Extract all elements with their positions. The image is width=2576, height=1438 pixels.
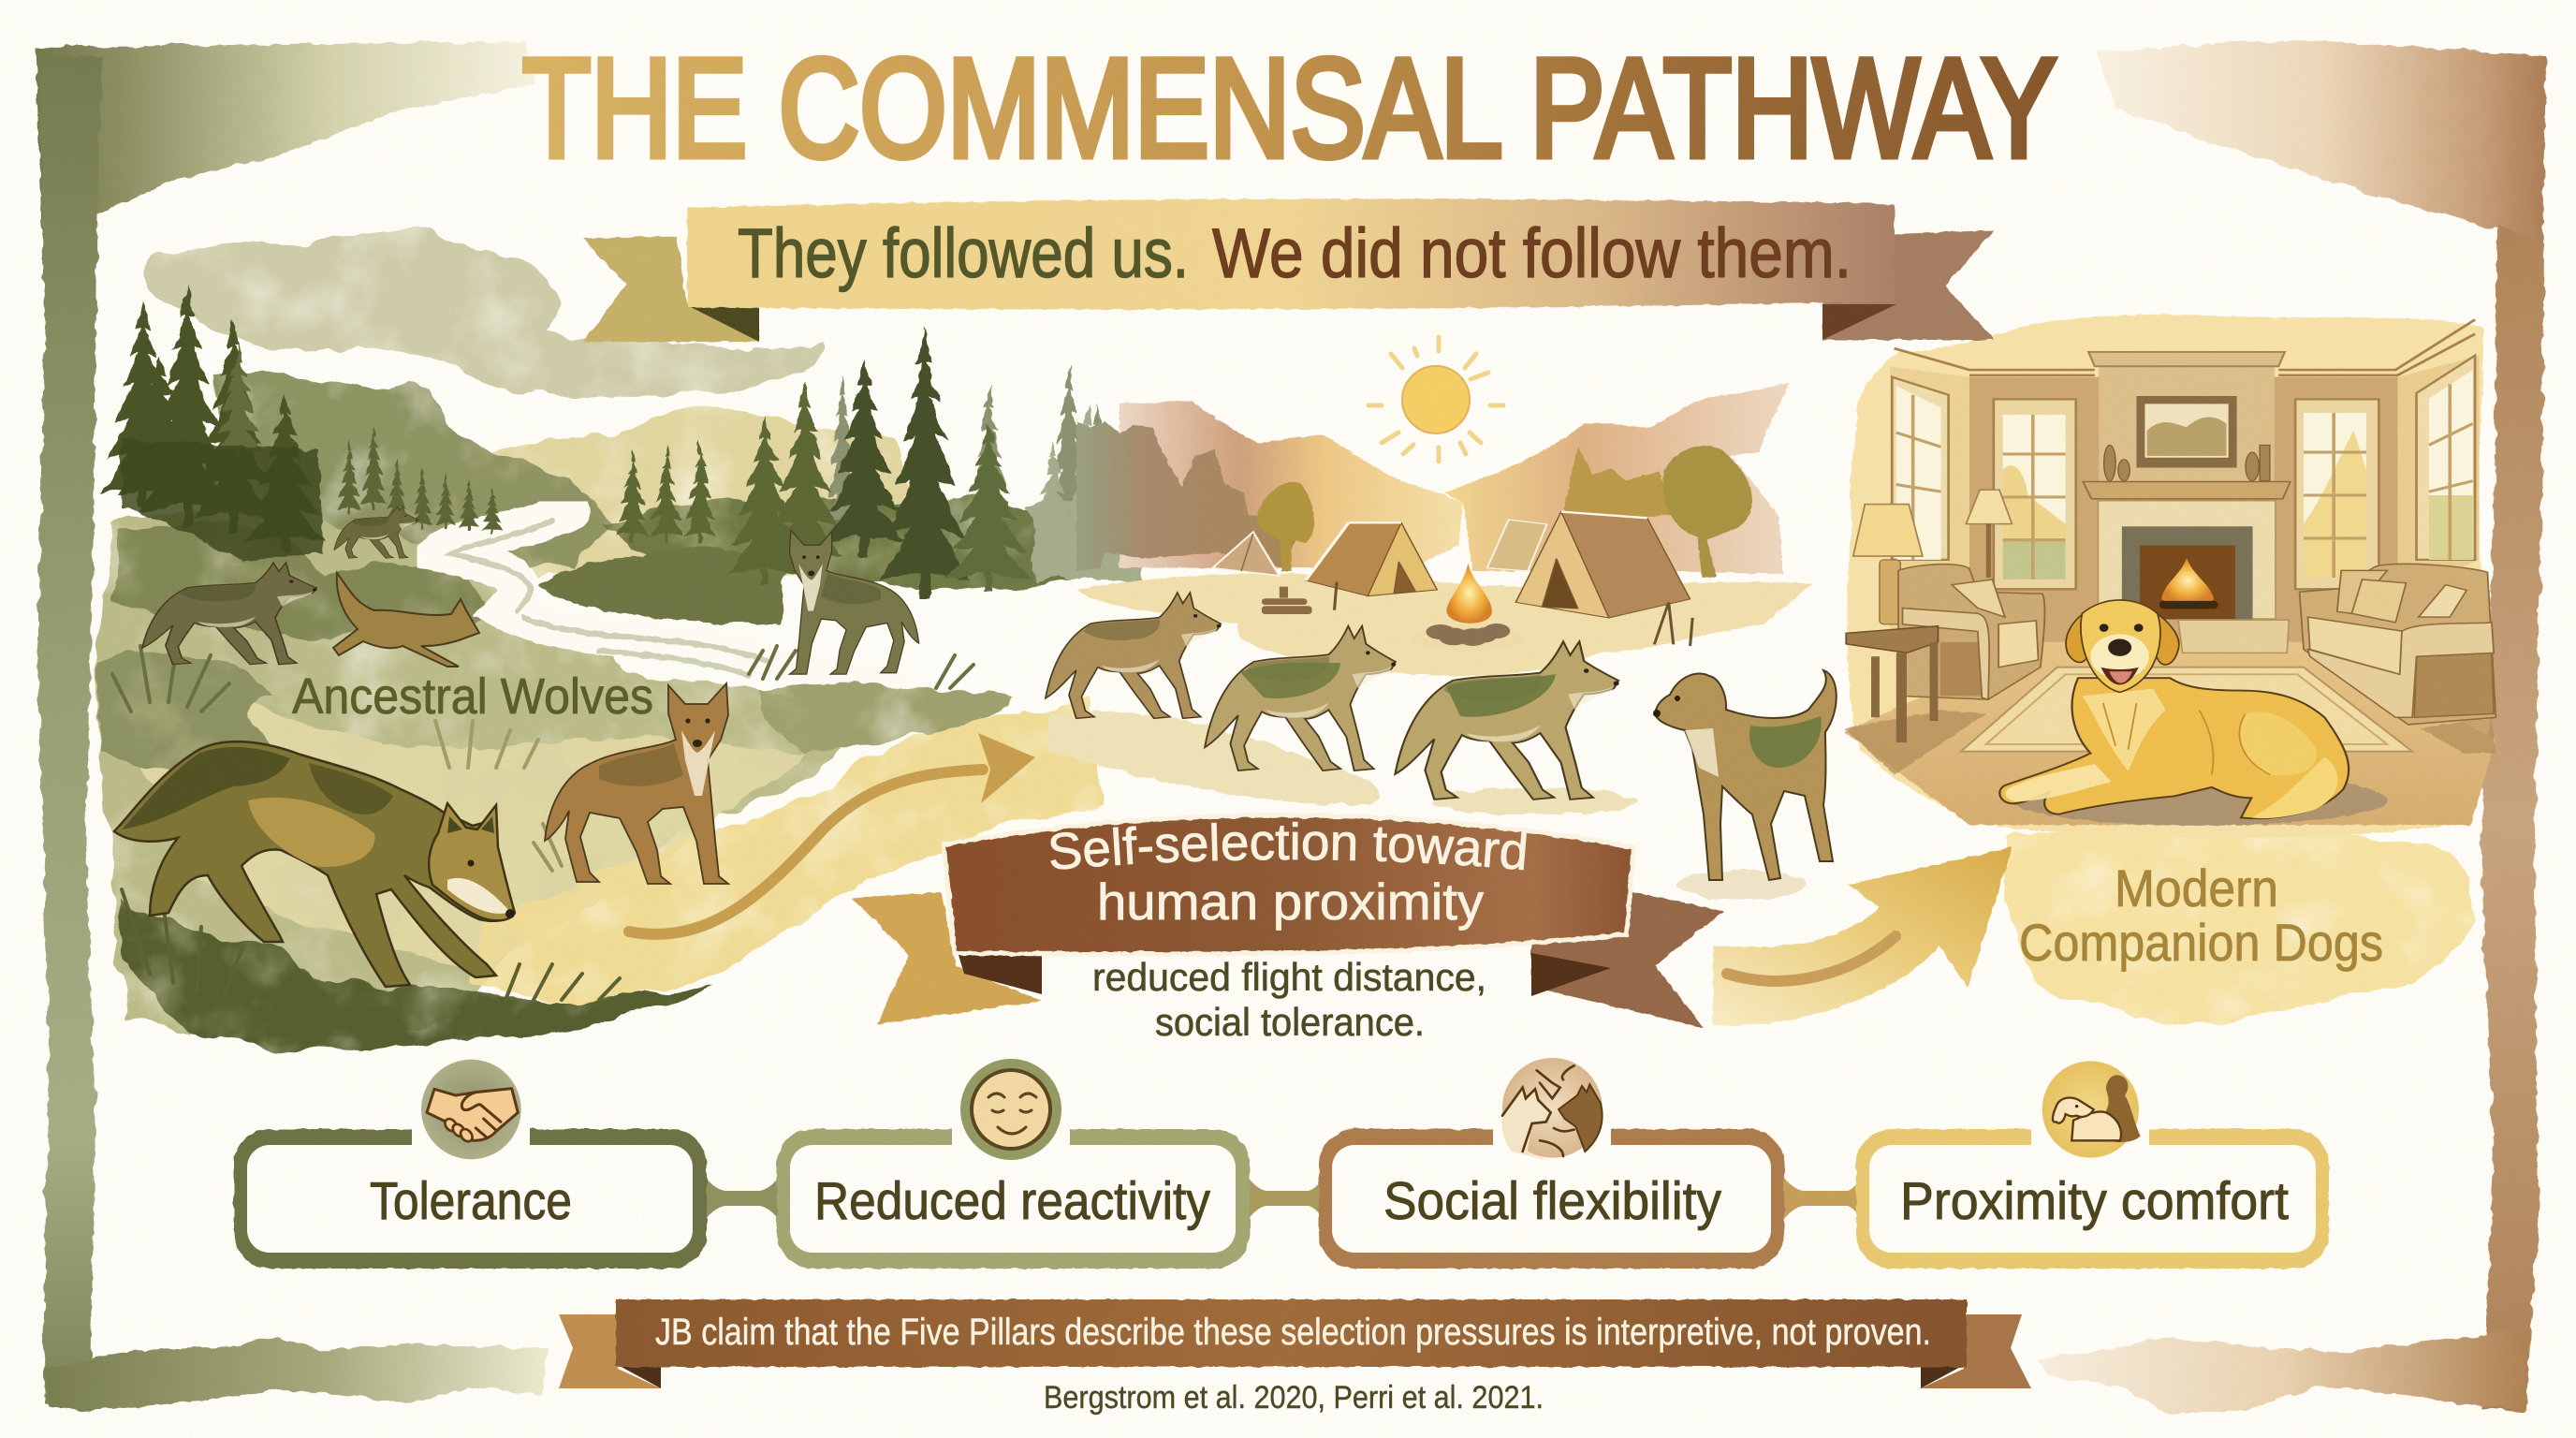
small tree row on hill: [337, 426, 503, 534]
pillar: proximity comfort: [1856, 1061, 2329, 1269]
clouds: [147, 230, 826, 398]
connector 1: [695, 1159, 788, 1238]
side table: [1846, 626, 1938, 742]
left tail: [559, 1314, 661, 1388]
icon: calm face: [960, 1059, 1061, 1160]
living room: [1844, 315, 2496, 838]
mid ground: [101, 508, 842, 1040]
cornice: [1895, 319, 2475, 375]
mountains left: [1120, 401, 1463, 568]
log pile: [1262, 587, 1312, 614]
camp scene: [1076, 382, 1812, 676]
fireplace: [2098, 501, 2276, 620]
right tail: [1822, 230, 1995, 340]
foreground grass blades: [122, 889, 620, 1000]
transition ground shadows: [1048, 712, 1807, 900]
banner text left: They followed us.: [738, 214, 1189, 292]
dog shadow: [2012, 774, 2387, 826]
river: [440, 510, 899, 683]
modern companion dogs label: Companion Dogs: [2019, 913, 2383, 972]
scroll subtext: [1092, 955, 1486, 1044]
pillar: reduced reactivity: [777, 1059, 1250, 1269]
landscape: ancestral wolf habitat: [101, 230, 1118, 1040]
floor: [1844, 642, 2496, 825]
scroll subtext: reduced flight distance,: [1092, 955, 1486, 999]
golden retriever: [1999, 600, 2349, 818]
tree mass left: [1076, 421, 1306, 571]
olive hill: [215, 369, 608, 571]
campfire: [1411, 564, 1526, 652]
river island: [537, 547, 786, 624]
tent: large: [1515, 512, 1690, 618]
icon: two canine heads: [1501, 1058, 1603, 1161]
floor shadow: [1844, 711, 2496, 775]
scroll subtext: social tolerance.: [1155, 1000, 1425, 1044]
left wall: [1890, 366, 1969, 631]
ancestral wolves label: Ancestral Wolves: [292, 668, 653, 725]
scroll body: [944, 815, 1633, 954]
banner text right: We did not follow them.: [1212, 214, 1852, 292]
forest to camp fade trees: [1030, 403, 1151, 580]
sofa: [2300, 564, 2496, 725]
ribbon body: [616, 1299, 1967, 1367]
citation: Bergstrom et al. 2020, Perri et al. 2021.: [1044, 1380, 1544, 1416]
distant hills: [440, 410, 936, 580]
connector 2: [1237, 1159, 1331, 1238]
tent highlights: [1306, 512, 1647, 580]
scroll text line 2: human proximity: [1097, 873, 1485, 931]
pillar: reduced reactivity: Reduced reactivity: [814, 1171, 1210, 1231]
thin arrow: [629, 733, 1035, 934]
tree mass right: [1563, 447, 1674, 521]
window back left: [1994, 399, 2076, 589]
table lamp: [1853, 505, 1923, 624]
wolf: facing viewer on path: [545, 683, 728, 884]
wolf: transition two: [1205, 626, 1396, 770]
frame: bottom-right brown wash: [2039, 1329, 2527, 1414]
pillar: social flexibility: Social flexibility: [1383, 1171, 1721, 1231]
round tree right: [1663, 446, 1752, 578]
pillar: tolerance: [234, 1060, 707, 1269]
left tail: [583, 236, 759, 342]
right wall: [2397, 356, 2480, 595]
back wall: [1969, 377, 2397, 642]
chimney crown: [2088, 352, 2285, 366]
wolf: left walking: [142, 563, 317, 665]
round tree left: [1257, 482, 1314, 571]
chimney breast: [2099, 366, 2275, 488]
bottom note ribbon: [559, 1299, 2031, 1388]
frame: left olive border: [36, 42, 534, 1404]
icon: person and dog: [2042, 1061, 2141, 1158]
ribbon text: JB claim that the Five Pillars describe these selection pressures is interpretive, not proven.: [655, 1312, 1931, 1353]
big brown scroll: Self-selection toward: [1050, 822, 1527, 871]
mountains right: [1444, 382, 1791, 574]
connector 3: [1773, 1159, 1868, 1238]
window left side: [1892, 377, 1949, 560]
dirt path with thin arrow: [117, 697, 1105, 1049]
grass tufts: [112, 637, 973, 871]
title: THE COMMENSAL PATHWAY: [522, 29, 2056, 186]
right tail: [1921, 1314, 2031, 1388]
wolf: running: [333, 573, 479, 667]
left conifer cluster: [101, 285, 325, 562]
pillars: [234, 1058, 2329, 1269]
window back right: [2295, 399, 2378, 589]
right conifer forest: [616, 328, 1118, 599]
wolf: large stalking: [114, 741, 515, 987]
modern companion dogs label: Modern: [2115, 858, 2278, 917]
frame: bottom-left olive wash: [45, 1337, 548, 1410]
floor lamp: [1966, 490, 2012, 578]
mantel vases: [2104, 445, 2270, 481]
tent: far left: [1212, 532, 1280, 576]
ground wash: [1076, 574, 1812, 676]
picture: [2136, 396, 2237, 468]
pillar: tolerance: Tolerance: [370, 1171, 572, 1231]
room wash: [1847, 315, 2493, 838]
frame: right brown border: [2097, 39, 2546, 1414]
pillar: social flexibility: [1319, 1058, 1784, 1269]
wolf: far small: [334, 506, 417, 558]
pillar: proximity comfort: Proximity comfort: [1900, 1171, 2289, 1231]
forest floor wash: [602, 500, 1105, 588]
big brown scroll: [852, 813, 1762, 1028]
sun: [1368, 337, 1503, 462]
top ribbon banner: [583, 198, 1995, 342]
modern companion dogs label: [2019, 858, 2383, 972]
armchair: [1898, 565, 2044, 699]
tent stakes: [1335, 582, 1692, 646]
window right side: [2417, 356, 2475, 560]
wolf: transition three: [1395, 641, 1619, 800]
hearth: [2178, 620, 2289, 653]
left tail: [852, 892, 1042, 1024]
rug: [1961, 668, 2412, 752]
scroll text line 1: [1041, 859, 1535, 871]
tent: medium: [1306, 522, 1437, 596]
foreground dark grass: [117, 899, 711, 1049]
modern wash: [2003, 820, 2472, 1022]
right tail: [1531, 891, 1724, 1028]
mantel: [2083, 481, 2291, 499]
standing ground: [758, 679, 1020, 749]
tent: far right: [1487, 520, 1547, 571]
large yellow arrow: [1713, 847, 2012, 1025]
dog: mixed transition: [1653, 670, 1837, 880]
wolf: transition one: [1046, 593, 1222, 718]
wolf: standing on knoll: [790, 530, 919, 674]
banner body: [687, 198, 1895, 309]
icon: handshake: [421, 1060, 521, 1159]
